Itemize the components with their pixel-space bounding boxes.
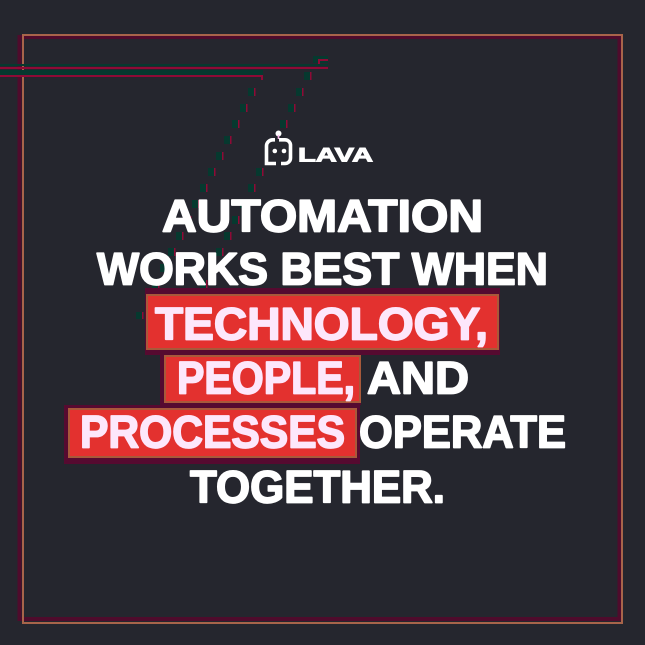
headline: AUTOMATION xyxy=(162,190,483,242)
highlight: people xyxy=(165,356,360,402)
highlight: processes xyxy=(69,409,356,457)
highlight: technology xyxy=(147,295,498,349)
circuit lines xyxy=(0,56,328,319)
headline: WORKS BEST WHEN xyxy=(97,244,548,294)
headline: AND xyxy=(367,352,469,404)
headline: TECHNOLOGY, xyxy=(155,298,488,350)
logo: Lava xyxy=(266,130,373,166)
headline xyxy=(80,190,566,512)
wordmark: LAVA xyxy=(298,146,373,166)
headline: PEOPLE, xyxy=(177,352,355,404)
icon: robot head xyxy=(266,130,290,164)
highlight boxes xyxy=(64,288,500,464)
headline: PROCESSES xyxy=(80,406,345,458)
headline: TOGETHER. xyxy=(190,462,445,512)
headline: OPERATE xyxy=(359,406,566,458)
